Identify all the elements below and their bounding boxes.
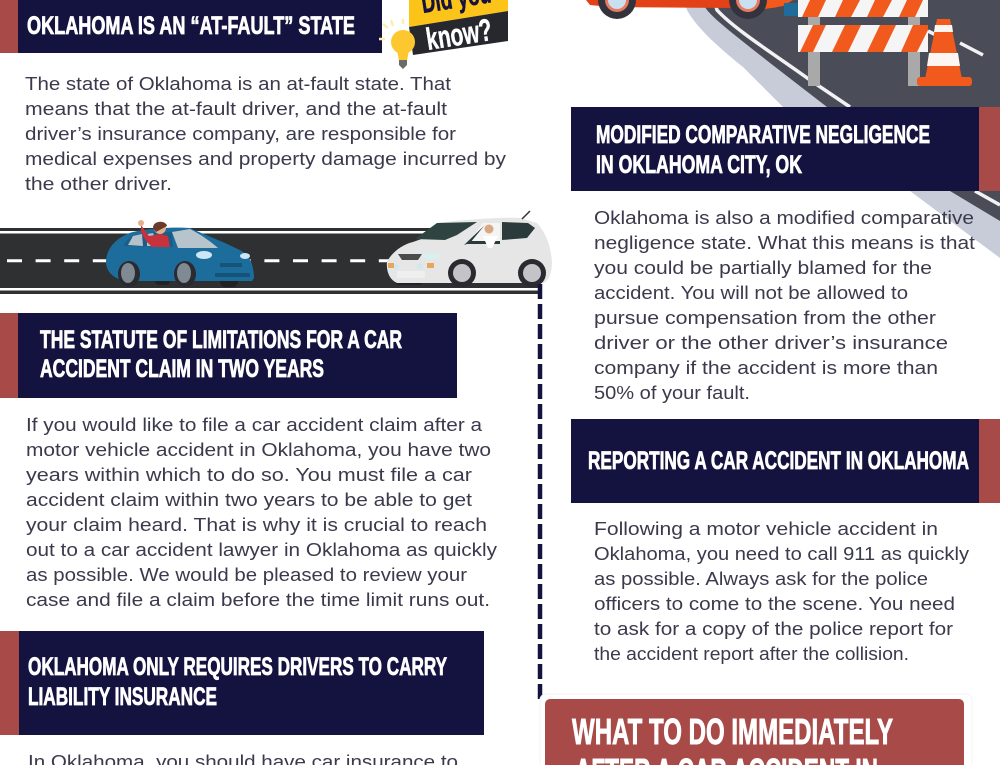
heading: at-fault state: OKLAHOMA IS AN “AT-FAULT” STATE [27, 12, 355, 40]
text: reporting explanation: Oklahoma, you need to call 911 as quickly [594, 544, 969, 564]
text: modified comparative negligence explanation: negligence state. What this means is that [594, 233, 975, 253]
text: modified comparative negligence explanation [594, 208, 975, 403]
heading: modified comparative negligence [571, 107, 1000, 191]
heading: liability insurance: OKLAHOMA ONLY REQUIRES DRIVERS TO CARRY [28, 653, 447, 681]
text: at-fault state explanation: driver’s insurance company, are responsible for [25, 124, 456, 144]
illustration: blue car with waving driver [106, 220, 254, 287]
heading: statute of limitations: ACCIDENT CLAIM IN TWO YEARS [40, 355, 324, 383]
text: at-fault state explanation: the other driver. [25, 174, 172, 194]
text: modified comparative negligence explanation: driver or the other driver’s insurance [594, 333, 948, 353]
icon: did you know badge [379, 0, 508, 69]
text: modified comparative negligence explanation: you could be partially blamed for the [594, 258, 932, 278]
text: reporting explanation: as possible. Always ask for the police [594, 569, 928, 589]
text: modified comparative negligence explanation: Oklahoma is also a modified comparative [594, 208, 974, 228]
text: at-fault state explanation: medical expenses and property damage incurred by [25, 149, 506, 169]
text: at-fault state explanation: means that the at-fault driver, and the at-fault [25, 99, 447, 119]
text: modified comparative negligence explanation: pursue compensation from the other [594, 308, 936, 328]
text: reporting explanation: officers to come to the scene. You need [594, 594, 955, 614]
heading: at-fault state [0, 0, 382, 53]
illustration: white car with driver [387, 211, 552, 287]
heading: modified comparative negligence: IN OKLAHOMA CITY, OK [596, 151, 802, 179]
heading: statute of limitations [0, 313, 457, 398]
heading: liability insurance: LIABILITY INSURANCE [28, 683, 217, 711]
icon: traffic cone [917, 19, 972, 86]
barrier [798, 0, 928, 86]
text: modified comparative negligence explanation: company if the accident is more than [594, 358, 938, 378]
text: reporting explanation: Following a motor vehicle accident in [594, 519, 938, 539]
illustration: straight road [0, 228, 540, 294]
text: statute explanation: your claim heard. That is why it is crucial to reach [26, 515, 487, 535]
heading: reporting a car accident [571, 419, 1000, 503]
heading: statute of limitations: THE STATUTE OF LIMITATIONS FOR A CAR [40, 326, 402, 354]
text: statute explanation: accident claim within two years to be able to get [26, 490, 472, 510]
text: statute explanation: out to a car accident lawyer in Oklahoma as quickly [26, 540, 497, 560]
text: statute explanation: as possible. We would be pleased to review your [26, 565, 467, 585]
illustration: red car [586, 0, 798, 19]
text: statute explanation [26, 415, 497, 610]
text: statute explanation: years within which to do so. You must file a car [26, 465, 472, 485]
text: modified comparative negligence explanation: 50% of your fault. [594, 383, 750, 403]
road continuation below heading [910, 191, 1000, 258]
text: modified comparative negligence explanation: accident. You will not be allowed to [594, 283, 908, 303]
dashed connector line [538, 284, 542, 700]
text: at-fault state explanation: The state of Oklahoma is an at-fault state. That [25, 74, 451, 94]
icon: did you know badge: know? [424, 12, 494, 57]
text: reporting explanation [594, 519, 969, 664]
text: statute explanation: If you would like to file a car accident claim after a [26, 415, 483, 435]
text: reporting explanation: to ask for a copy of the police report for [594, 619, 953, 639]
text: at-fault state explanation [25, 74, 506, 194]
text: reporting explanation: the accident report after the collision. [594, 644, 909, 664]
panel: what to do immediately [540, 694, 972, 765]
illustration: curved road with barrier, cone and red car [586, 0, 1000, 107]
text: statute explanation: case and file a claim before the time limit runs out. [26, 590, 490, 610]
text: statute explanation: motor vehicle accident in Oklahoma, you have two [26, 440, 491, 460]
heading: liability insurance [0, 631, 484, 735]
